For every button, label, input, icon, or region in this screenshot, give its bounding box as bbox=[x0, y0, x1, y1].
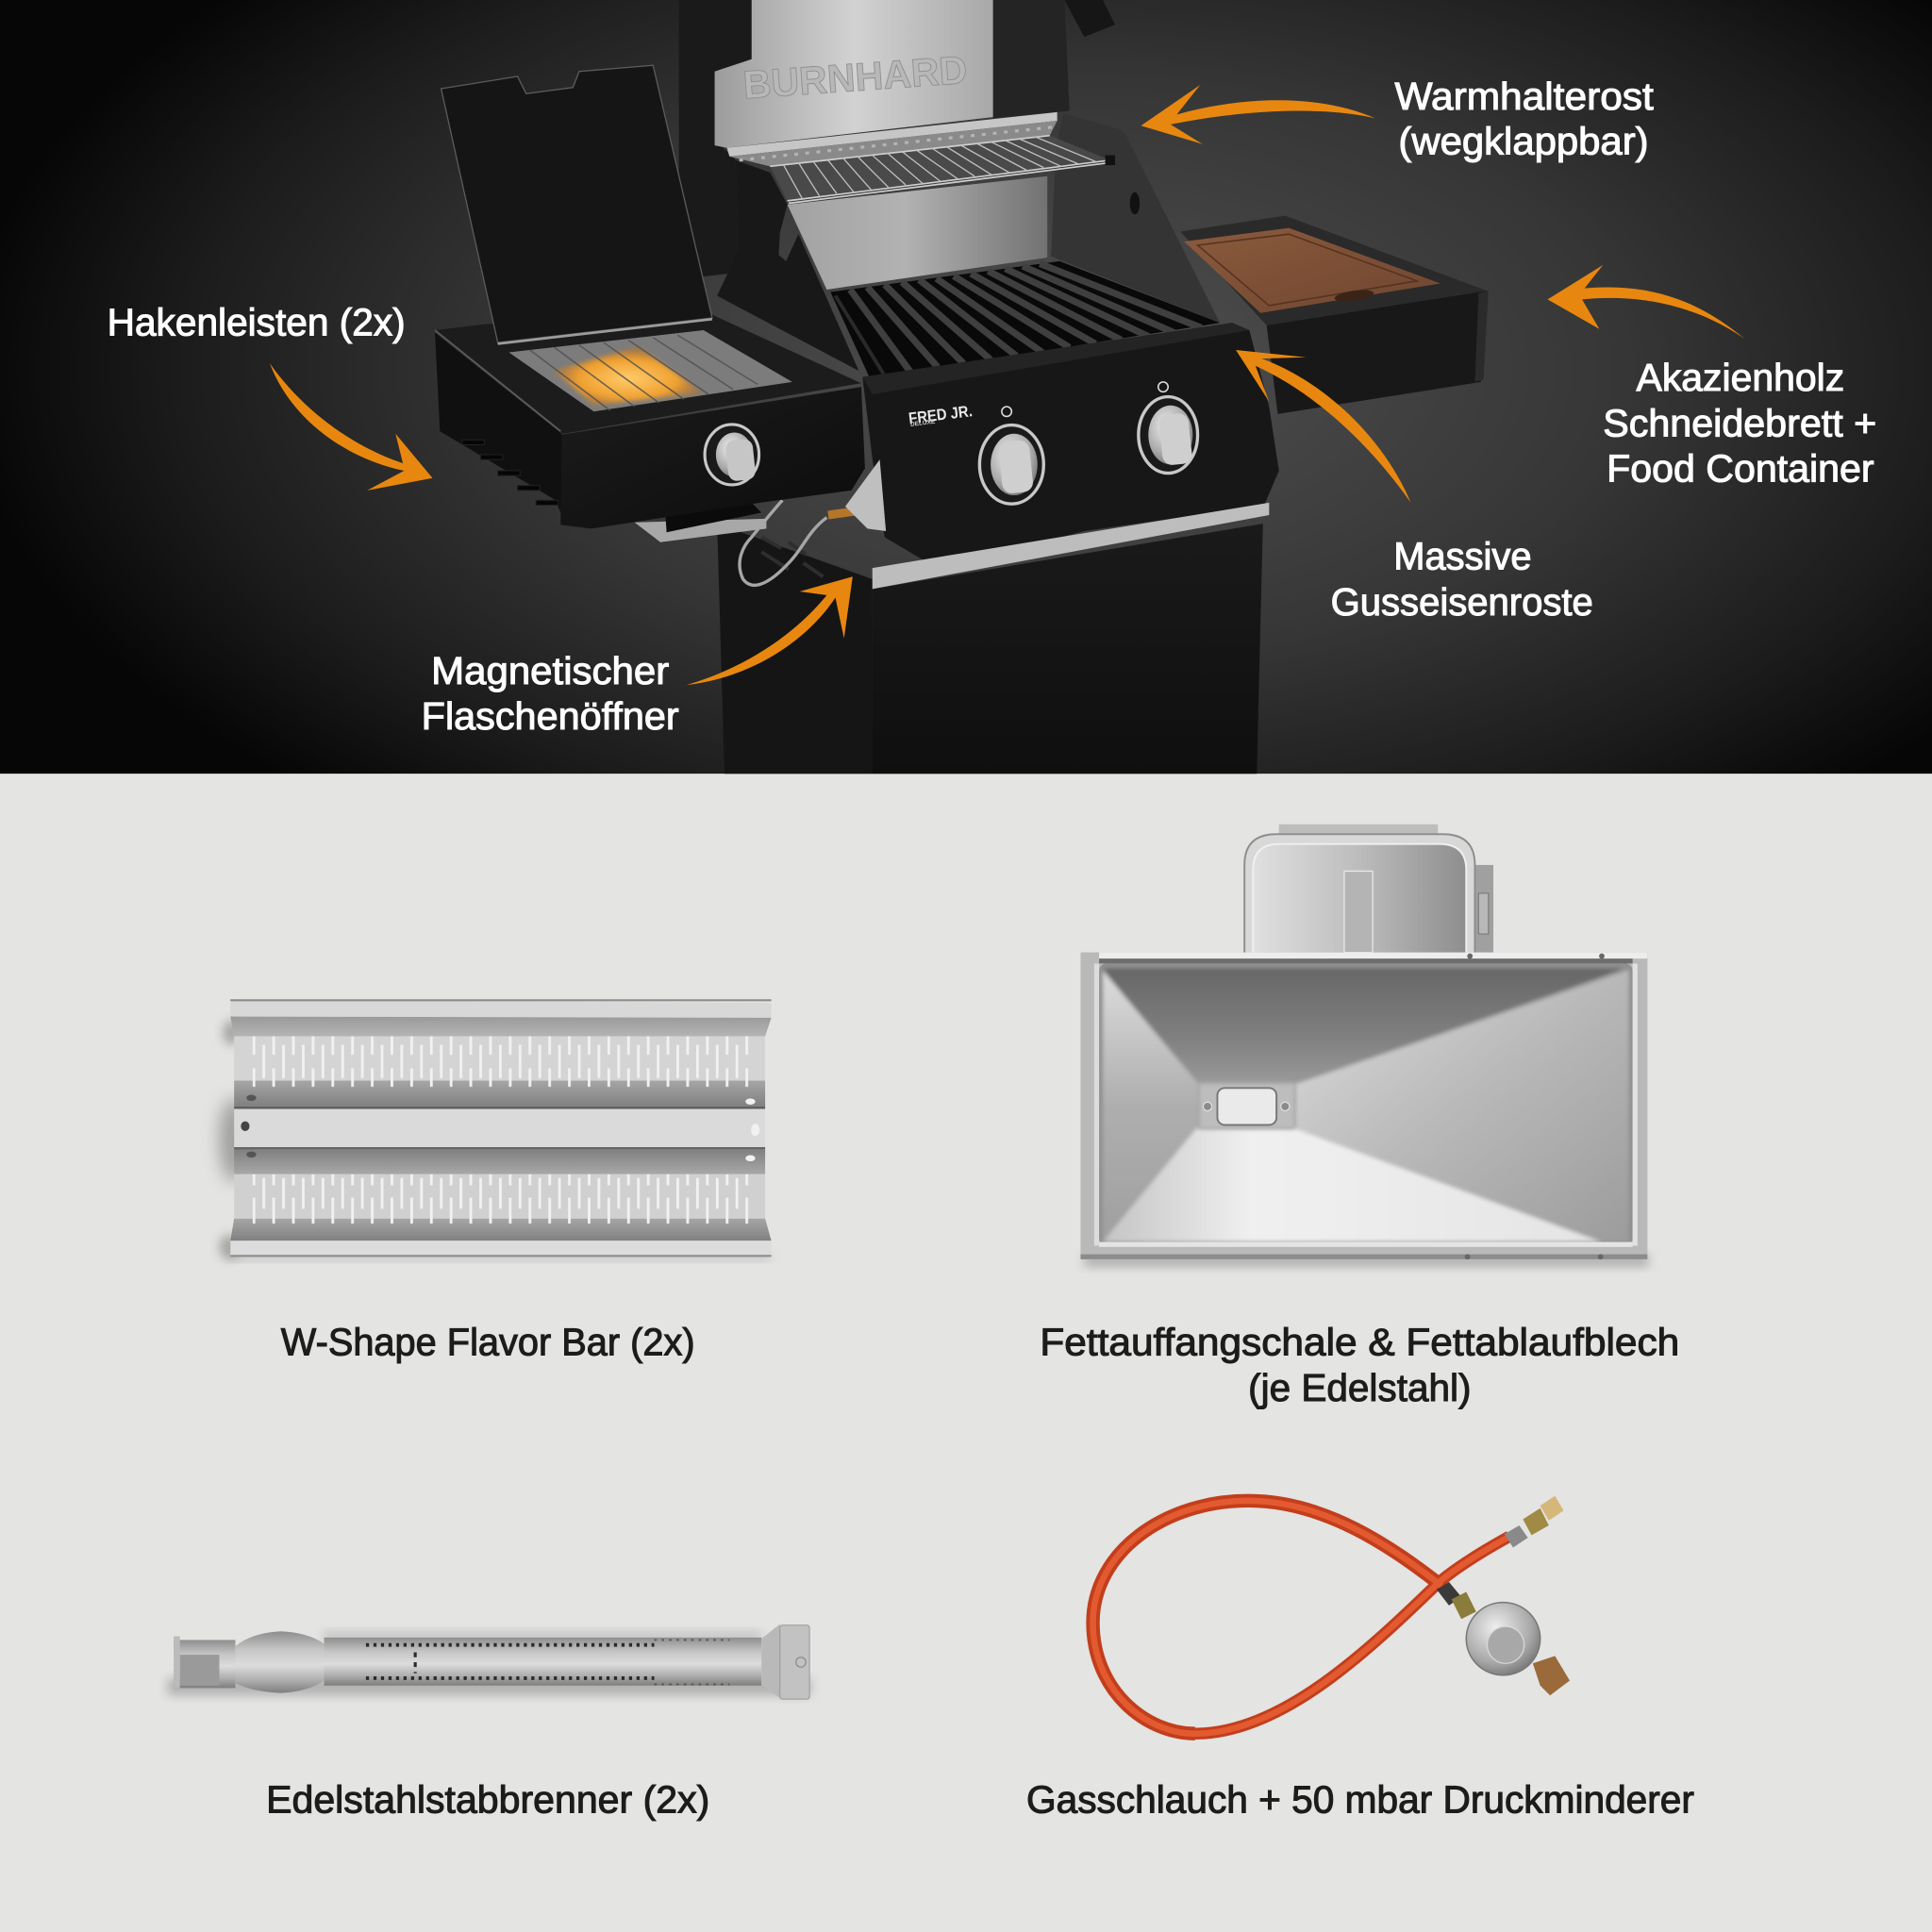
side knob bbox=[705, 425, 759, 485]
part: stainless bar burner bbox=[168, 1624, 810, 1699]
tray rim and pan bbox=[1080, 953, 1647, 1259]
hose brass fitting bbox=[827, 507, 856, 520]
label: Magnetischer Flaschenoeffner: Magnetischer bbox=[431, 649, 669, 692]
right shelf bbox=[1180, 216, 1489, 414]
drain platform bbox=[1199, 1083, 1295, 1128]
embossed brand: BURNHARD bbox=[741, 47, 969, 107]
part: grease tray and drip sheet bbox=[1080, 824, 1649, 1267]
flame ports bbox=[366, 1643, 655, 1646]
label: W-Shape Flavor Bar: W-Shape Flavor Bar (2x) bbox=[281, 1321, 695, 1364]
label: Akazienholz: Food Container bbox=[1607, 447, 1874, 491]
label: Magnetischer Flaschenoeffner bbox=[422, 649, 679, 738]
hinge plate bbox=[845, 459, 886, 531]
arrow: hook rails bbox=[270, 363, 432, 491]
grill photo illustration bbox=[435, 0, 1489, 774]
side burner lid bbox=[441, 65, 712, 342]
label: Gasschlauch: Gasschlauch + 50 mbar Druckminderer bbox=[1026, 1777, 1694, 1821]
silver rail bbox=[873, 503, 1269, 589]
arrow: warming rack bbox=[1141, 85, 1375, 144]
label: Fettauffangschale: Fettauffangschale & Fettablaufblech bbox=[1040, 1321, 1679, 1364]
label: Akazienholz bbox=[1603, 356, 1876, 491]
label: Magnetischer Flaschenoeffner: Flaschenöffner bbox=[422, 694, 679, 738]
knob 1 bbox=[979, 407, 1043, 504]
brand badge: FRED JR. bbox=[908, 402, 974, 427]
pull tray bbox=[635, 503, 766, 542]
label: Akazienholz: Schneidebrett + bbox=[1603, 401, 1876, 444]
label: Warmhalterost: (wegklappbar) bbox=[1398, 119, 1649, 162]
label: Warmhalterost bbox=[1395, 75, 1654, 162]
control panel bbox=[862, 323, 1279, 569]
label: Warmhalterost: Warmhalterost bbox=[1395, 75, 1654, 118]
arrow: cutting board bbox=[1547, 265, 1744, 339]
container behind tray bbox=[1244, 824, 1493, 955]
arrow: bottle opener bbox=[687, 576, 853, 685]
panel: light parts background bbox=[0, 774, 1932, 1932]
upper brass fitting bbox=[1505, 1496, 1563, 1547]
arrow: cast iron grates bbox=[1236, 350, 1411, 503]
label: Fettauffangschale: (je Edelstahl) bbox=[1248, 1366, 1472, 1409]
label: Massive Gusseisenroste bbox=[1331, 534, 1593, 624]
regulator bbox=[1437, 1582, 1570, 1695]
lid with stainless back bbox=[679, 0, 1115, 290]
label: Edelstahlstabbrenner: Edelstahlstabbrenner (2x) bbox=[266, 1777, 709, 1821]
side burner bbox=[435, 65, 865, 528]
tray rim ring bbox=[1080, 953, 1647, 1259]
label: Massive Gusseisenroste: Gusseisenroste bbox=[1331, 580, 1593, 624]
part: W-shape flavor bar bbox=[219, 999, 772, 1260]
label: Akazienholz: Akazienholz bbox=[1637, 356, 1844, 399]
panel: dark photo background bbox=[0, 0, 1932, 774]
control panel: DELUXE bbox=[910, 419, 936, 428]
knob 2 bbox=[1139, 382, 1198, 474]
right inner wall bbox=[1051, 113, 1220, 323]
part: gas hose and regulator bbox=[1093, 1496, 1570, 1734]
gas hose bbox=[740, 500, 826, 585]
cabinet left side bbox=[717, 524, 873, 774]
hook rails bbox=[462, 440, 558, 506]
label: Fettauffangschale bbox=[1040, 1321, 1679, 1409]
left inner wall bbox=[717, 160, 858, 371]
cabinet front bbox=[873, 524, 1263, 774]
main cast iron grate bbox=[830, 261, 1220, 378]
tray facets bbox=[1103, 969, 1629, 1242]
label: Massive Gusseisenroste: Massive bbox=[1393, 534, 1532, 577]
label: Hakenleisten: Hakenleisten (2x) bbox=[108, 300, 406, 343]
warming rack bbox=[727, 112, 1115, 204]
